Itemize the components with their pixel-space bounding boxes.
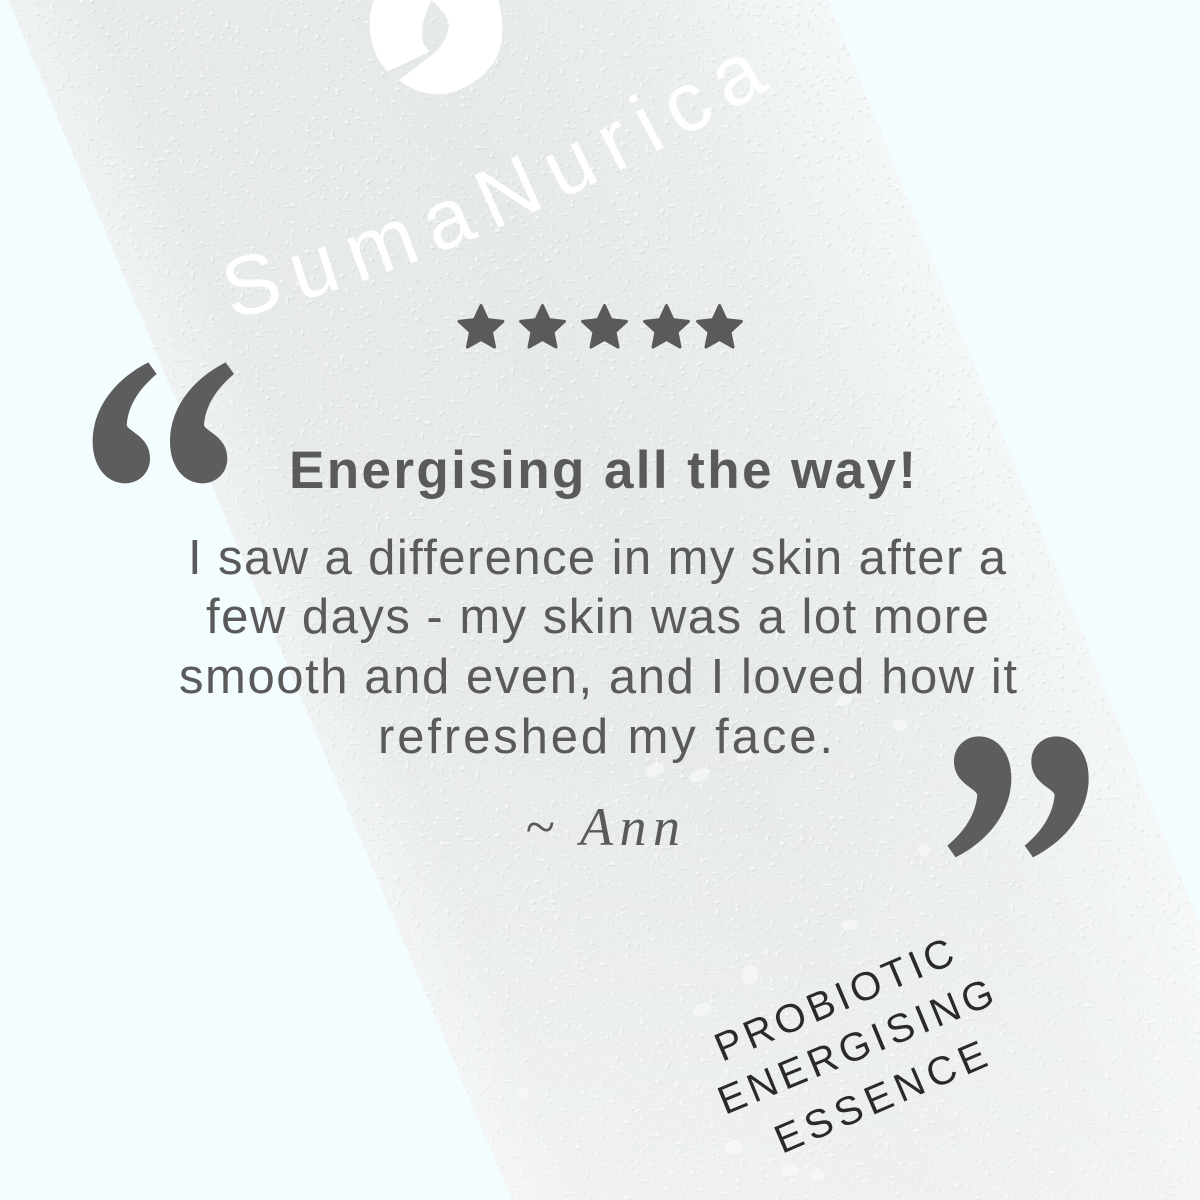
review body: few days - my skin was a lot more bbox=[206, 590, 989, 644]
opening quotation mark bbox=[93, 362, 234, 483]
brand name: SumaNurica bbox=[226, 57, 770, 314]
logo mark bbox=[370, 0, 502, 94]
reviewer name: ~ Ann bbox=[525, 797, 680, 857]
review body: refreshed my face. bbox=[378, 710, 833, 764]
product name on bottle: PROBIOTIC bbox=[708, 930, 960, 1070]
review body: I saw a difference in my skin after a bbox=[188, 531, 1007, 585]
rating stars bbox=[459, 306, 741, 347]
product name on bottle: ESSENCE bbox=[768, 1033, 993, 1162]
review body: smooth and even, and I loved how it bbox=[179, 650, 1017, 704]
closing quotation mark bbox=[947, 736, 1089, 857]
product name on bottle bbox=[708, 930, 1000, 1162]
review heading: Energising all the way! bbox=[289, 441, 916, 500]
product name on bottle: ENERGISING bbox=[712, 971, 1000, 1123]
review body bbox=[179, 531, 1017, 764]
